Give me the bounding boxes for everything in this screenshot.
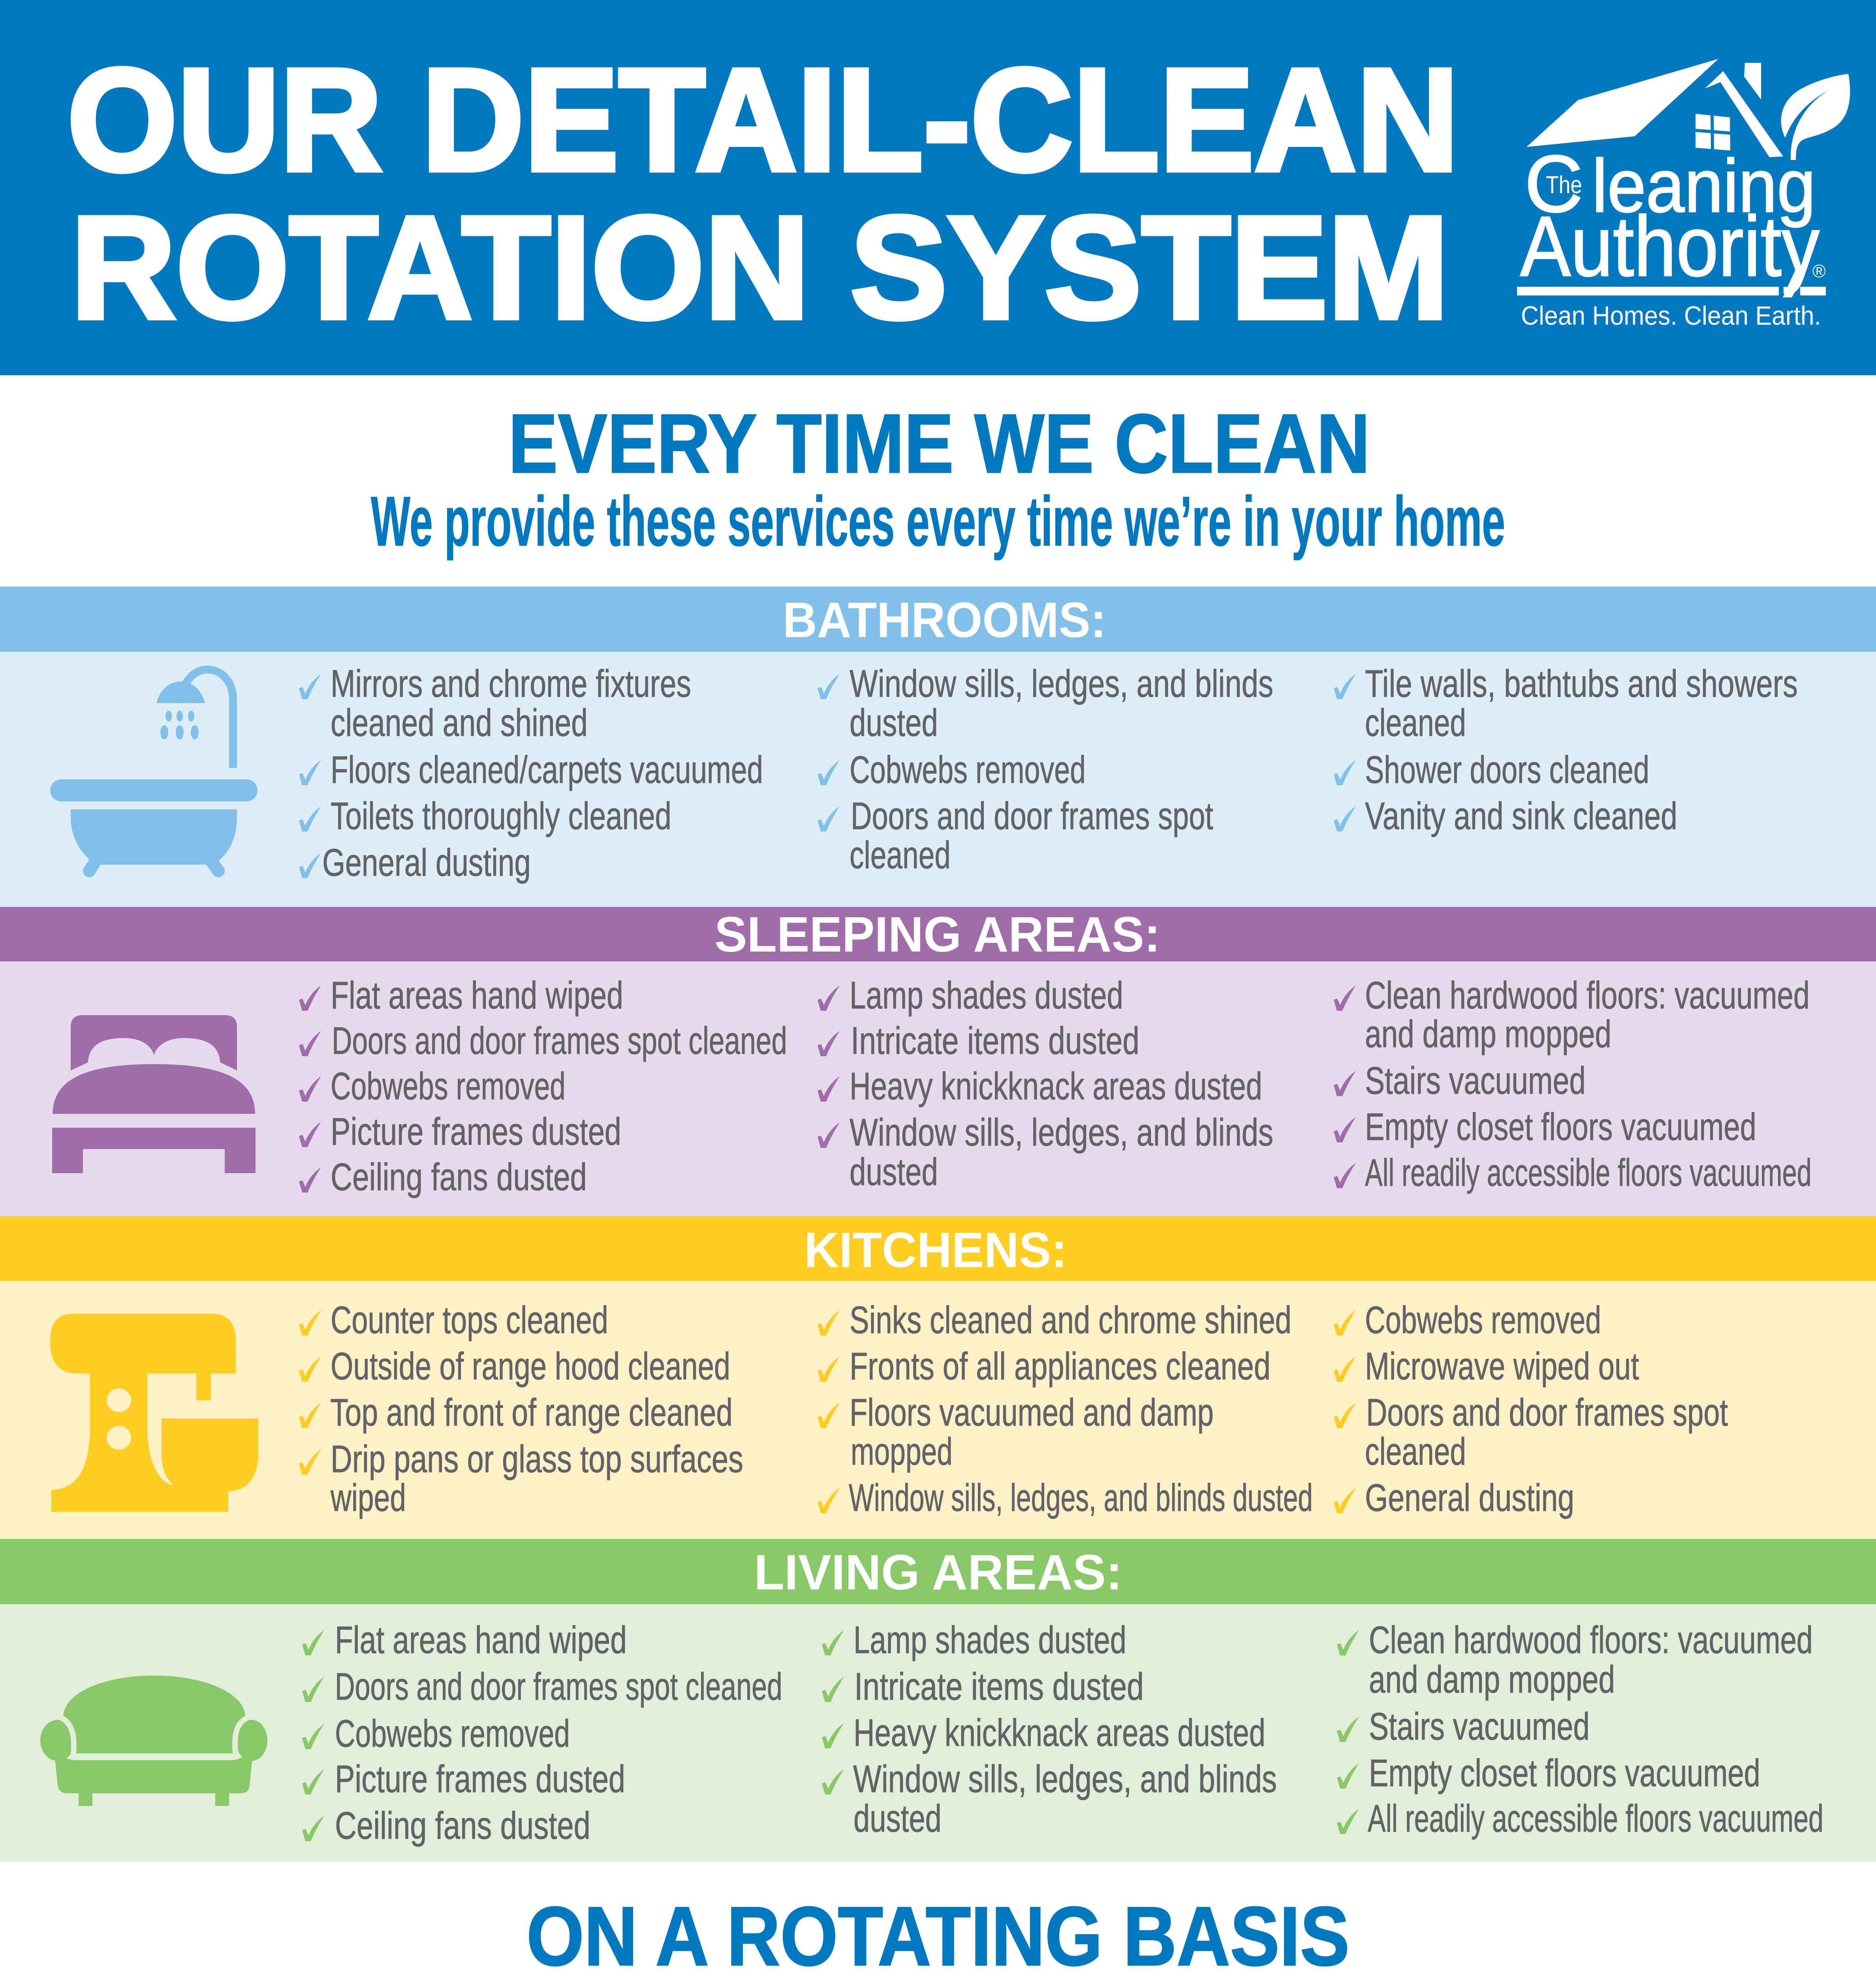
list: sleeping areas column 2: Heavy knickknack areas dusted [850,1065,1262,1108]
icon: bed [52,1015,256,1173]
list: kitchens column 3: Cobwebs removed [1365,1298,1601,1341]
logo: The Cleaning Authority: C [1524,139,1583,229]
list: bathrooms column 2: Cobwebs removed [850,748,1086,791]
list: living areas column 3: Stairs vacuumed [1369,1705,1590,1748]
list: sleeping areas column 2: Window sills, ledges, and blinds [850,1111,1273,1154]
list: sleeping areas column 3 [1334,974,1812,1194]
icon: bathtub with shower [50,670,258,871]
list: sleeping areas column 3: and damp mopped [1365,1012,1611,1055]
heading: every time we clean [371,397,1505,561]
list: sleeping areas column 1: Ceiling fans dusted [331,1155,587,1198]
icon: stand mixer [50,1314,258,1512]
logo: The Cleaning Authority: ® [1812,261,1826,281]
panel: living areas every time [0,1539,1876,1862]
list: sleeping areas column 3: Empty closet floors vacuumed [1365,1105,1756,1148]
list: living areas column 1: Ceiling fans dusted [335,1804,590,1847]
list: bathrooms column 2 [818,662,1273,877]
list: kitchens column 2: Window sills, ledges, and blinds dusted [849,1476,1313,1519]
panel: kitchens every time [0,1216,1876,1539]
list: living areas column 2: Lamp shades dusted [853,1618,1126,1661]
logo: The Cleaning Authority: leaning [1592,144,1816,228]
list: bathrooms column 1: Toilets thoroughly cleaned [331,794,671,837]
list: kitchens column 1: wiped [330,1476,406,1519]
list: bathrooms column 2: dusted [850,701,938,744]
list: bathrooms column 2: Window sills, ledges, and blinds [850,662,1273,705]
title: ROTATION SYSTEM [71,186,1449,349]
list: sleeping areas column 1 [299,974,787,1198]
list: sleeping areas column 1: Doors and door frames spot cleaned [332,1019,787,1062]
title [67,38,1459,349]
heading: kitchens: KITCHENS: [804,1222,1067,1278]
list: living areas column 1: Cobwebs removed [335,1712,570,1755]
heading: bathrooms: BATHROOMS: [783,592,1106,648]
list: kitchens column 1: Counter tops cleaned [331,1298,608,1341]
panel: sleeping areas every time [0,907,1876,1216]
list: sleeping areas column 2: Intricate items dusted [851,1019,1139,1062]
logo: The Cleaning Authority: Clean Homes. Clean Earth. [1521,301,1821,331]
list: kitchens column 3 [1334,1298,1728,1519]
list: bathrooms column 2: cleaned [850,833,951,877]
list: living areas column 1: Doors and door frames spot cleaned [335,1665,782,1708]
icon: sofa [40,1673,267,1806]
heading: living areas: LIVING AREAS: [754,1544,1122,1600]
list: kitchens column 1: Top and front of range cleaned [330,1391,733,1434]
list: bathrooms column 3: Vanity and sink cleaned [1365,794,1677,837]
list: sleeping areas column 1: Cobwebs removed [331,1065,566,1108]
list: living areas column 2: Window sills, ledges, and blinds [853,1757,1277,1800]
list: living areas column 3: Empty closet floors vacuumed [1369,1751,1760,1794]
list: sleeping areas column 1: Picture frames dusted [331,1110,621,1153]
list: living areas column 3: and damp mopped [1369,1658,1615,1701]
list: kitchens column 1: Outside of range hood cleaned [331,1345,730,1388]
list: kitchens column 2: Sinks cleaned and chrome shined [850,1298,1291,1341]
list: bathrooms column 1: cleaned and shined [331,701,588,744]
list: kitchens column 2: Fronts of all appliances cleaned [850,1345,1271,1388]
list: sleeping areas column 2: Lamp shades dusted [850,974,1123,1017]
list: sleeping areas column 3: Stairs vacuumed [1365,1059,1586,1102]
list: kitchens column 3: cleaned [1365,1430,1466,1473]
list: bathrooms column 1: Mirrors and chrome fixtures [331,662,691,705]
list: living areas column 1: Flat areas hand wiped [335,1618,627,1661]
heading: sleeping areas: SLEEPING AREAS: [714,907,1160,962]
list: living areas column 2: Heavy knickknack areas dusted [853,1711,1265,1754]
list: bathrooms column 1 [299,662,763,884]
list: living areas column 2: Intricate items dusted [854,1665,1144,1708]
panel: bathrooms every time [0,587,1876,907]
title: OUR DETAIL-CLEAN [67,38,1459,201]
list: sleeping areas column 2 [818,974,1273,1193]
header banner [0,0,1876,375]
list: bathrooms column 3: cleaned [1365,701,1466,744]
list: sleeping areas column 2: dusted [850,1150,938,1193]
logo: The Cleaning Authority: Authority [1520,198,1820,294]
list: bathrooms column 2: Doors and door frames spot [851,794,1213,837]
list: sleeping areas column 1: Flat areas hand wiped [331,974,623,1017]
list: bathrooms column 1: General dusting [322,841,531,884]
list: living areas column 1 [302,1618,782,1847]
list: bathrooms column 3 [1334,662,1798,837]
list: living areas column 2 [822,1618,1277,1840]
list: kitchens column 2: Floors vacuumed and damp [850,1391,1214,1434]
list: kitchens column 3: General dusting [1365,1476,1574,1519]
list: kitchens column 2: mopped [851,1430,953,1473]
list: living areas column 1: Picture frames dusted [335,1757,625,1800]
list: kitchens column 1: Drip pans or glass top surfaces [331,1437,743,1480]
list: bathrooms column 1: Floors cleaned/carpets vacuumed [331,748,763,791]
list: bathrooms column 3: Shower doors cleaned [1365,748,1649,791]
heading: every time we clean: EVERY TIME WE CLEAN [508,397,1370,490]
list: living areas column 3 [1337,1618,1823,1840]
logo: The Cleaning Authority: The [1546,171,1582,199]
logo: The Cleaning Authority [1517,59,1850,331]
list: kitchens column 3: Doors and door frames spot [1366,1391,1728,1434]
list: kitchens column 1 [299,1298,743,1519]
list: kitchens column 2 [818,1298,1313,1519]
list: kitchens column 3: Microwave wiped out [1365,1345,1639,1388]
list: living areas column 2: dusted [853,1797,942,1840]
